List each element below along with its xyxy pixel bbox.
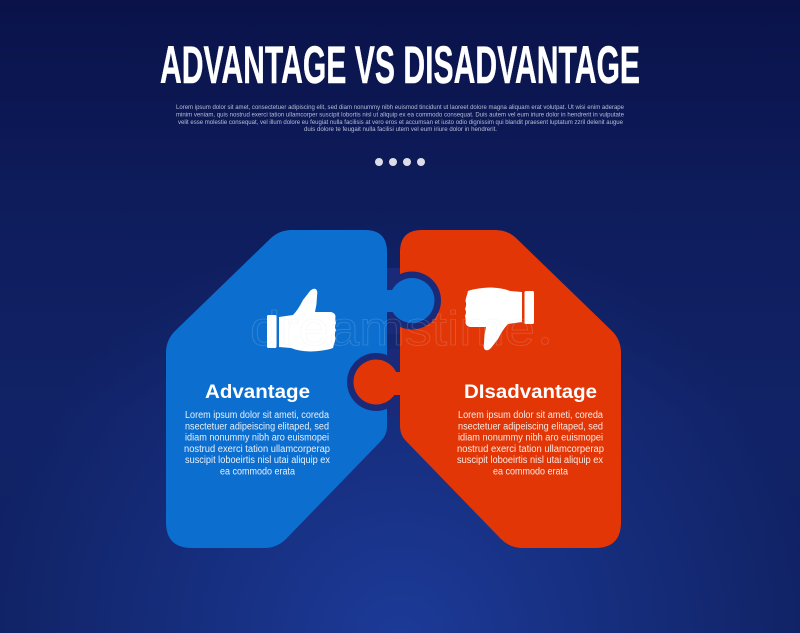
connector: blue tab (387, 268, 441, 330)
intro paragraph: duis dolore te feugait nulla facilisi utem vel eum iriure dolor in hendrerit. (304, 126, 497, 133)
heading: advantage: Advantage (205, 382, 310, 403)
icon: thumbs up (267, 289, 336, 352)
text block: disadvantage: nostrud exerci tation ullamcorperap (457, 444, 604, 455)
text block: disadvantage: Lorem ipsum dolor sit ameti, coreda (458, 410, 603, 421)
text block: advantage: ea commodo erata (220, 466, 295, 478)
text block: advantage: nsectetuer adipeiscing elitaped, sed (185, 421, 329, 432)
intro paragraph (176, 104, 624, 133)
pagination dots (375, 158, 425, 166)
heading: disadvantage: DIsadvantage (464, 382, 597, 403)
icon: thumbs down (465, 288, 534, 350)
text block: disadvantage: idiam nonummy nibh aro euismopei (458, 433, 603, 444)
intro paragraph: Lorem ipsum dolor sit amet, consectetuer adipiscing elit, sed diam nonummy nibh euismod tincidunt ut laoreet dolore magna aliquam erat volutpat. Ut wisi enim aderape (176, 104, 624, 111)
text block: disadvantage: nsectetuer adipeiscing elitaped, sed (458, 421, 603, 432)
text block: disadvantage: suscipit loboeirtis nisl utai aliquip ex (457, 455, 603, 466)
intro paragraph: minim veniam, quis nostrud exerci tation ullamcorper suscipit lobortis nisl ut aliquip ex ea commodo consequat. Duis autem vel eum iriure dolor in hendrerit in vulputate (176, 112, 624, 118)
text block: advantage (184, 410, 330, 478)
panel: disadvantage puzzle piece (400, 230, 621, 548)
watermark: dreamstime (250, 303, 535, 356)
text block: advantage: nostrud exerci tation ullamcorperap (184, 444, 330, 455)
intro paragraph: velit esse molestie consequat, vel illum dolore eu feugiat nulla facilisis at vero eros et accumsan et iusto odio dignissim qui blandit praesent luptatum zzril delenit augue (178, 119, 623, 126)
text block: advantage: suscipit loboeirtis nisl utai aliquip ex (185, 455, 330, 466)
text block: disadvantage (457, 410, 604, 478)
panel: advantage puzzle piece (166, 230, 387, 548)
text block: advantage: idiam nonummy nibh aro euismopei (185, 433, 329, 444)
text block: advantage: Lorem ipsum dolor sit ameti, coreda (185, 410, 329, 421)
connector: red tab (347, 353, 400, 411)
text block: disadvantage: ea commodo erata (493, 466, 568, 478)
